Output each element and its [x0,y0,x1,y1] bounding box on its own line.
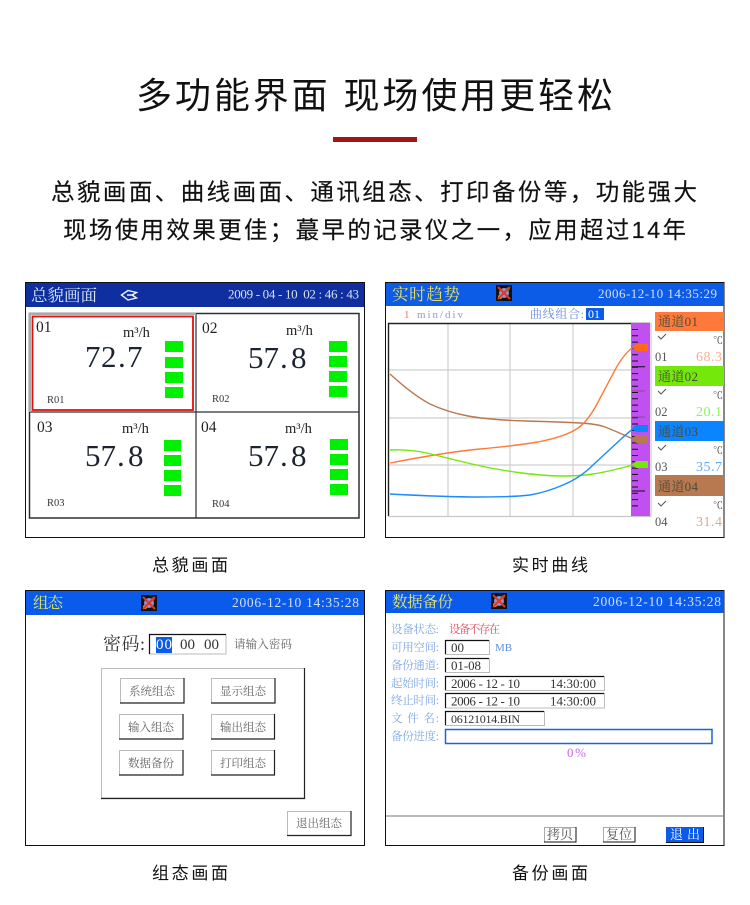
channel 01 [36,319,183,406]
caption: real-time curves: 实时曲线 [512,556,588,575]
intro text [51,179,697,243]
channel 01 selection [32,316,193,410]
panel: configuration screen [26,590,364,846]
channel 02: 02 [202,320,218,337]
channel legend 01: 68.3 [696,350,722,365]
button: output config [211,714,274,739]
button: data backup: 数据备份 [128,756,174,770]
channel legend 01: ℃ [713,335,723,347]
overview header bar [26,283,364,307]
curve: channel 02 green [390,450,633,476]
scale strip [631,323,650,516]
panel: backup screen [386,590,724,846]
free space field: MB [495,642,512,654]
channel legend 02: ℃ [713,390,723,402]
channel 02: m³/h [286,323,314,339]
channel 01: m³/h [123,325,151,341]
icon: disabled tools [141,595,157,611]
channel 04: 04 [201,419,217,436]
backup channel field [446,658,490,673]
backup field labels: 终止时间: [391,693,439,707]
file name field [446,712,544,726]
start time field: 14:30:00 [550,676,596,691]
caption: backup: 备份画面 [512,864,588,883]
channel 04: 57.8 [248,438,306,473]
password label: 密码: [103,634,145,654]
curve: channel 04 brown [390,374,633,439]
configuration menu box [101,668,304,798]
channel legend 01: 通道01 [658,314,698,329]
channel legend 03: ℃ [713,445,723,457]
channel legend 03: 35.7 [696,460,722,475]
panel: overview screen [26,282,364,538]
device status value: 设备不存在 [449,622,500,636]
caption: overview: 总貌画面 [152,556,228,575]
file name field: 06121014.BIN [451,712,520,726]
password hint: 请输入密码 [234,637,292,651]
button: exit config [287,811,351,836]
curve: channel 03 blue [390,428,635,497]
channel 04: m³/h [285,421,313,437]
password input: 00 [180,637,195,653]
caption: configuration: 组态画面 [152,864,228,883]
intro text: 总貌画面、曲线画面、通讯组态、打印备份等，功能强大 [51,179,697,205]
configuration date and time: 2006-12-10 14:35:28 [232,595,359,610]
channel markers [632,344,648,468]
end time field: 2006 - 12 - 10 [451,694,520,708]
password input [150,634,226,654]
button: system config [120,678,184,703]
trend chart [388,323,651,516]
channel 02: R02 [212,394,230,405]
channel 02: 57.8 [248,340,306,375]
backup field labels: 文 件 名: [391,711,439,725]
button: system config: 系统组态 [129,684,175,698]
channel legend 03: 03 [655,460,668,474]
time scale label: min/div [417,309,464,321]
overview heading: 总貌画面 [31,286,97,305]
configuration heading: 组态 [33,594,63,612]
channel 01: R01 [47,395,65,406]
channel legend 04: 31.4 [696,515,722,530]
channel legend 01 [655,312,724,365]
channel 04 [201,419,348,510]
backup channel field: 01-08 [451,658,481,673]
curves heading: 实时趋势 [392,285,460,304]
channel 02 [202,320,347,405]
button: output config: 输出组态 [220,720,266,734]
channel 03: m³/h [122,421,150,437]
time scale label: 1 [404,309,410,321]
progress percentage: 0 % [567,745,586,760]
button: print config [211,750,274,775]
channel legend 04: ℃ [713,500,723,512]
channel legend 02: 20.1 [696,405,722,420]
panel: real-time curves screen [386,282,724,538]
free space field: 00 [451,640,464,655]
button: data backup [119,750,183,775]
end time field: 14:30:00 [550,694,596,708]
password input: 00 [204,637,219,653]
button: input config [119,714,183,739]
backup heading: 数据备份 [392,593,453,611]
title accent bar [333,137,417,142]
backup field labels: 起始时间: [391,676,439,690]
curves header bar [386,283,724,306]
backup field labels: 设备状态: [391,622,439,636]
backup field labels: 可用空间: [391,640,439,654]
channel legend 03 [655,421,724,475]
backup field labels [391,622,439,743]
backup field labels: 备份进度: [391,729,439,743]
icon: disabled tools [491,593,507,609]
overview date and time: 2009 - 04 - 10 02 : 46 : 43 [228,286,359,302]
password input: 00 [156,637,172,653]
icon: back chevrons [122,290,136,300]
icon: disabled tools [496,285,512,301]
channel 03 [37,419,181,509]
start time field: 2006 - 12 - 10 [451,676,520,691]
channel legend 02: 通道02 [658,369,698,384]
backup progress bar [446,730,712,744]
channel legend 04: 通道04 [658,479,698,494]
curve group selector [530,306,604,321]
channel 03: R03 [47,498,65,509]
channel 01: 72.7 [85,339,142,374]
curves date and time: 2006-12-10 14:35:29 [598,286,717,301]
backup date and time: 2006-12-10 14:35:28 [593,594,721,609]
button: display config: 显示组态 [220,685,266,698]
start time field [446,676,604,691]
channel legend 02: 02 [655,405,668,419]
button: reset: 复位 [606,827,632,842]
channel 01: 01 [36,319,52,336]
button: display config [211,678,275,703]
channel 03: 03 [37,419,53,436]
free space field [446,640,512,655]
backup field labels: 备份通道: [391,659,439,672]
intro text: 现场使用效果更佳；蕞早的记录仪之一，应用超过14年 [63,217,686,243]
end time field [446,694,604,708]
button: copy: 拷贝 [547,827,573,842]
curve group selector: 01 [588,307,600,321]
button: print config: 打印组态 [220,756,266,770]
curve group selector: 曲线组合: [530,306,584,321]
overview four channel grid [29,313,359,518]
title: 多功能界面 现场使用更轻松 [136,75,613,116]
backup header bar [386,591,724,613]
channel legend 03: 通道03 [658,424,698,439]
channel legend 04 [655,475,724,530]
channel legend 04: 04 [655,515,668,529]
curve: channel 01 orange [390,347,633,463]
channel 04: R04 [212,499,230,510]
channel legend 01: 01 [655,350,668,364]
button: exit config: 退出组态 [296,816,342,830]
button: input config: 输入组态 [128,720,174,734]
configuration header bar [26,591,364,615]
channel legend 02 [655,366,724,420]
button: exit: 退 出 [670,827,700,842]
channel 03: 57.8 [85,438,144,473]
